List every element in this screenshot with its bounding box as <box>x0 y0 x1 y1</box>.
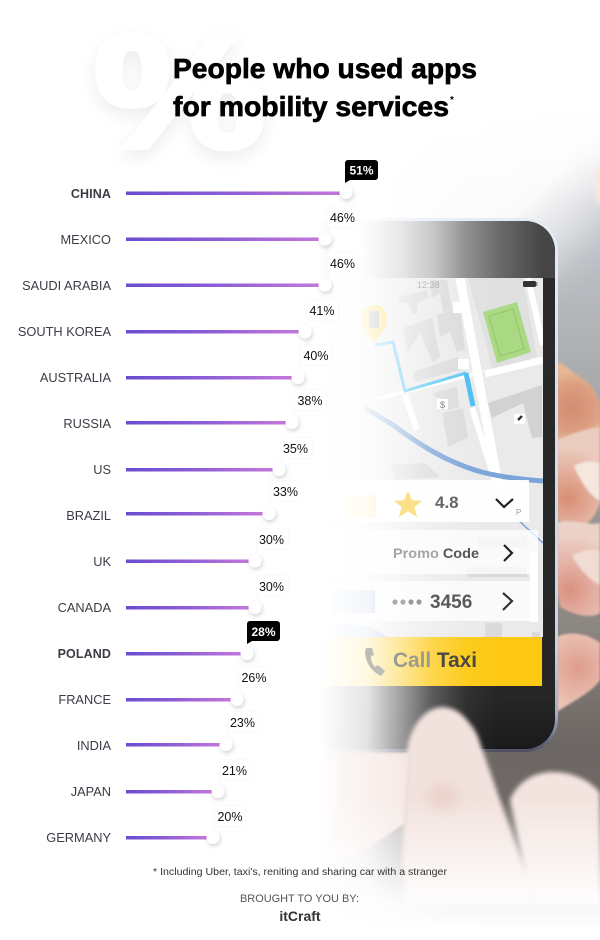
row: Mexico 46%: 46% <box>330 211 355 225</box>
row: India 23% <box>77 712 258 753</box>
bottom white fade <box>300 800 600 940</box>
photo backdrop <box>300 100 600 940</box>
row: US 35%: 35% <box>283 442 308 456</box>
title: People who used apps <box>173 53 477 84</box>
row: Poland 28%: POLAND <box>58 647 111 661</box>
row: Mexico 46%: MEXICO <box>61 232 111 247</box>
row: Canada 30% <box>58 576 288 615</box>
left card thumbnail <box>356 590 375 613</box>
bar chart <box>18 160 378 845</box>
row: Japan 21%: JAPAN <box>71 784 111 799</box>
row: Saudi Arabia 46% <box>22 253 358 293</box>
promo code row: Promo Code <box>393 545 479 561</box>
map river <box>365 408 543 481</box>
call taxi button label: Call Taxi <box>393 649 477 672</box>
left white fade <box>310 130 510 940</box>
photo: hand holding a phone <box>334 154 600 908</box>
map park <box>468 278 537 370</box>
diagonal street under panels <box>519 522 543 544</box>
phone screen: map: $ <box>440 400 445 410</box>
row: China 51%: CHINA <box>71 187 111 201</box>
map route <box>375 342 466 391</box>
panel: promo row <box>411 530 538 574</box>
map labels <box>437 302 525 424</box>
row: UK 30%: UK <box>93 554 111 569</box>
map buildings <box>409 280 542 637</box>
phone screen: map <box>335 278 543 686</box>
row: Russia 38%: RUSSIA <box>63 416 111 431</box>
row: Russia 38% <box>63 390 326 431</box>
map roads <box>396 278 543 480</box>
row: Germany 20%: 20% <box>217 810 243 824</box>
status bar: clock and battery: 12:38 <box>417 280 440 290</box>
row: Japan 21% <box>71 760 250 799</box>
title <box>173 53 477 122</box>
row: Canada 30%: CANADA <box>58 600 111 615</box>
phone body <box>180 218 558 752</box>
brand name: itCraft <box>279 908 321 924</box>
panel: card row <box>411 581 530 621</box>
row: China 51% <box>71 160 378 201</box>
row: Australia 40%: 40% <box>303 349 329 363</box>
row: US 35%: US <box>93 462 111 477</box>
map pin <box>361 305 387 342</box>
row: Poland 28%: 28% <box>251 625 276 639</box>
thumb and second finger <box>402 707 600 905</box>
row: Mexico 46% <box>61 207 358 247</box>
palm under the phone <box>312 753 410 870</box>
row: UK 30% <box>93 529 288 569</box>
credit line: BROUGHT TO YOU BY: <box>240 893 359 905</box>
row: Germany 20%: GERMANY <box>46 830 111 845</box>
panel: call taxi bar <box>335 637 542 686</box>
row: Brazil 33%: 33% <box>273 485 298 499</box>
row: Brazil 33%: BRAZIL <box>66 508 111 523</box>
title: for mobility services <box>173 91 449 122</box>
row: South Korea 41% <box>18 300 338 339</box>
status bar: clock and battery <box>418 281 538 288</box>
row: France 26% <box>58 667 269 707</box>
rating: star and value: 4.8 <box>435 493 459 512</box>
phone top bezel highlight <box>330 221 555 278</box>
row: Australia 40% <box>40 345 331 385</box>
row: US 35% <box>93 438 312 477</box>
footnote: * Including Uber, taxi's, reniting and sharing car with a stranger <box>153 866 447 878</box>
row: South Korea 41%: SOUTH KOREA <box>18 324 111 339</box>
row: Germany 20% <box>46 806 245 845</box>
call taxi button label <box>365 648 477 676</box>
row: South Korea 41%: 41% <box>309 304 335 318</box>
card number row <box>392 592 512 613</box>
taxi icon <box>350 495 376 518</box>
rating: star and value: P <box>516 508 521 517</box>
row: Poland 28% <box>58 621 280 661</box>
row: Saudi Arabia 46%: SAUDI ARABIA <box>22 278 111 293</box>
title: * <box>450 95 454 106</box>
row: Japan 21%: 21% <box>222 764 247 778</box>
row: Brazil 33% <box>66 481 302 523</box>
row: France 26%: 26% <box>241 671 267 685</box>
panel: rating row <box>398 480 529 522</box>
card number row: 3456 <box>430 592 472 613</box>
row: Russia 38%: 38% <box>297 394 323 408</box>
row: Saudi Arabia 46%: 46% <box>330 257 355 271</box>
row: China 51%: 51% <box>349 164 374 178</box>
row: France 26%: FRANCE <box>58 692 111 707</box>
watermark percent sign: % <box>94 2 266 181</box>
row: Canada 30%: 30% <box>259 580 284 594</box>
hand: fingers behind phone <box>557 362 600 712</box>
rating: star and value <box>394 491 521 517</box>
row: India 23%: INDIA <box>77 738 111 753</box>
thumb knuckle <box>427 783 459 811</box>
row: UK 30%: 30% <box>259 533 284 547</box>
row: Australia 40%: AUSTRALIA <box>40 370 111 385</box>
row: India 23%: 23% <box>230 716 255 730</box>
